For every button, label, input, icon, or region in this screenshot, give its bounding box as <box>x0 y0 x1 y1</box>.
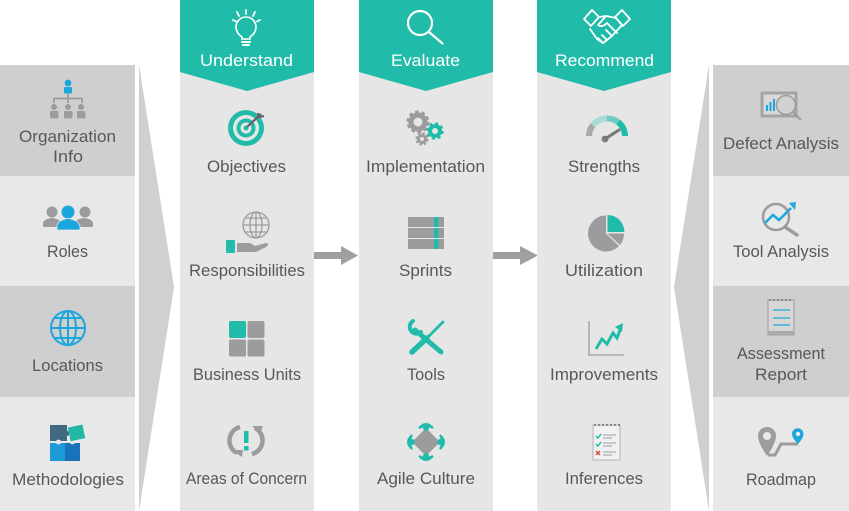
arrow: left funnel <box>139 65 174 511</box>
icon: team around table <box>408 424 444 460</box>
label: Organization Info <box>19 128 116 166</box>
label: Roadmap: Roadmap <box>746 471 816 489</box>
item: Roles <box>43 206 93 261</box>
label: Business Units: Business Units <box>193 366 301 384</box>
label: Tools: Tools <box>407 366 445 384</box>
item: Agile Culture <box>377 424 475 488</box>
label: Organization Info: Organization <box>19 128 116 146</box>
item: Organization Info <box>0 65 135 176</box>
label: Assessment Report: Assessment <box>737 345 825 363</box>
icon: route with pins <box>758 427 804 456</box>
icon: handshake <box>584 10 630 43</box>
icon: rising line chart <box>589 321 624 355</box>
header: Evaluate <box>359 0 493 91</box>
item: Methodologies <box>12 424 124 489</box>
label: Inferences: Inferences <box>565 470 643 488</box>
label: Responsibilities: Responsibilities <box>189 262 305 280</box>
item: Utilization <box>565 215 643 280</box>
item: Tools <box>407 321 445 384</box>
header: Recommend <box>537 0 671 91</box>
label: Utilization: Utilization <box>565 262 643 280</box>
label: Areas of Concern: Areas of Concern <box>186 470 307 488</box>
label: Tool Analysis: Tool Analysis <box>733 243 829 261</box>
panel: left inputs <box>0 65 135 511</box>
label: Strengths: Strengths <box>568 158 640 176</box>
arrow: right funnel <box>674 65 709 511</box>
item: Improvements <box>550 321 658 384</box>
column: Evaluate <box>359 0 493 511</box>
item: Areas of Concern <box>186 426 307 488</box>
column: Understand <box>180 0 314 511</box>
icon: puzzle pieces <box>50 424 85 461</box>
heading: Recommend: Recommend <box>555 51 654 70</box>
column: Recommend <box>537 0 671 511</box>
icon: gauge <box>589 118 625 142</box>
item: Objectives <box>207 110 286 176</box>
heading: Evaluate: Evaluate <box>391 51 460 70</box>
icon: chart under magnifier <box>762 93 801 120</box>
item: Strengths <box>568 118 640 176</box>
item: Defect Analysis <box>713 65 849 176</box>
icon: report notepad <box>768 300 794 335</box>
label: Agile Culture: Agile Culture <box>377 470 475 488</box>
icon: target <box>228 110 264 146</box>
label: Improvements: Improvements <box>550 366 658 384</box>
icon: wrench and screwdriver <box>410 321 443 352</box>
icon: checklist notepad <box>593 425 620 460</box>
icon: team of people <box>43 206 93 230</box>
item: Tool Analysis <box>733 202 829 261</box>
icon: gears <box>408 112 442 144</box>
label: Methodologies: Methodologies <box>12 471 124 489</box>
label: Roles: Roles <box>47 243 88 261</box>
icon: magnifying glass <box>408 11 442 44</box>
label: Assessment Report: Report <box>755 366 807 384</box>
item: Responsibilities <box>189 212 305 280</box>
item: Inferences <box>565 425 643 488</box>
icon: four squares <box>229 321 264 356</box>
icon: stacked bars <box>408 217 444 249</box>
arrow: Evaluate to Recommend <box>493 246 538 265</box>
panel: right outputs <box>713 65 849 511</box>
item: Business Units <box>193 321 301 384</box>
icon: globe on hand <box>226 212 269 253</box>
label: Locations: Locations <box>32 357 103 375</box>
icon: organization chart <box>50 80 86 118</box>
item: Assessment Report <box>713 286 849 397</box>
label: Objectives: Objectives <box>207 158 286 176</box>
label: Sprints: Sprints <box>399 262 452 280</box>
icon: pie chart <box>588 215 624 251</box>
label: Assessment Report <box>737 345 825 384</box>
icon: globe <box>51 311 85 345</box>
label: Defect Analysis: Defect Analysis <box>723 135 839 153</box>
heading: Understand: Understand <box>200 51 293 70</box>
icon: magnifier with trend <box>763 202 797 235</box>
item: Locations <box>0 286 135 397</box>
header: Understand <box>180 0 314 91</box>
arrow: Understand to Evaluate <box>314 246 358 265</box>
item: Roadmap <box>746 427 816 489</box>
icon: light bulb <box>233 10 260 45</box>
label: Implementation: Implementation <box>366 158 485 176</box>
item: Implementation <box>366 112 485 176</box>
label: Organization Info: Info <box>53 148 83 166</box>
item: Sprints <box>399 217 452 280</box>
icon: cycle arrows with exclamation <box>229 426 263 457</box>
